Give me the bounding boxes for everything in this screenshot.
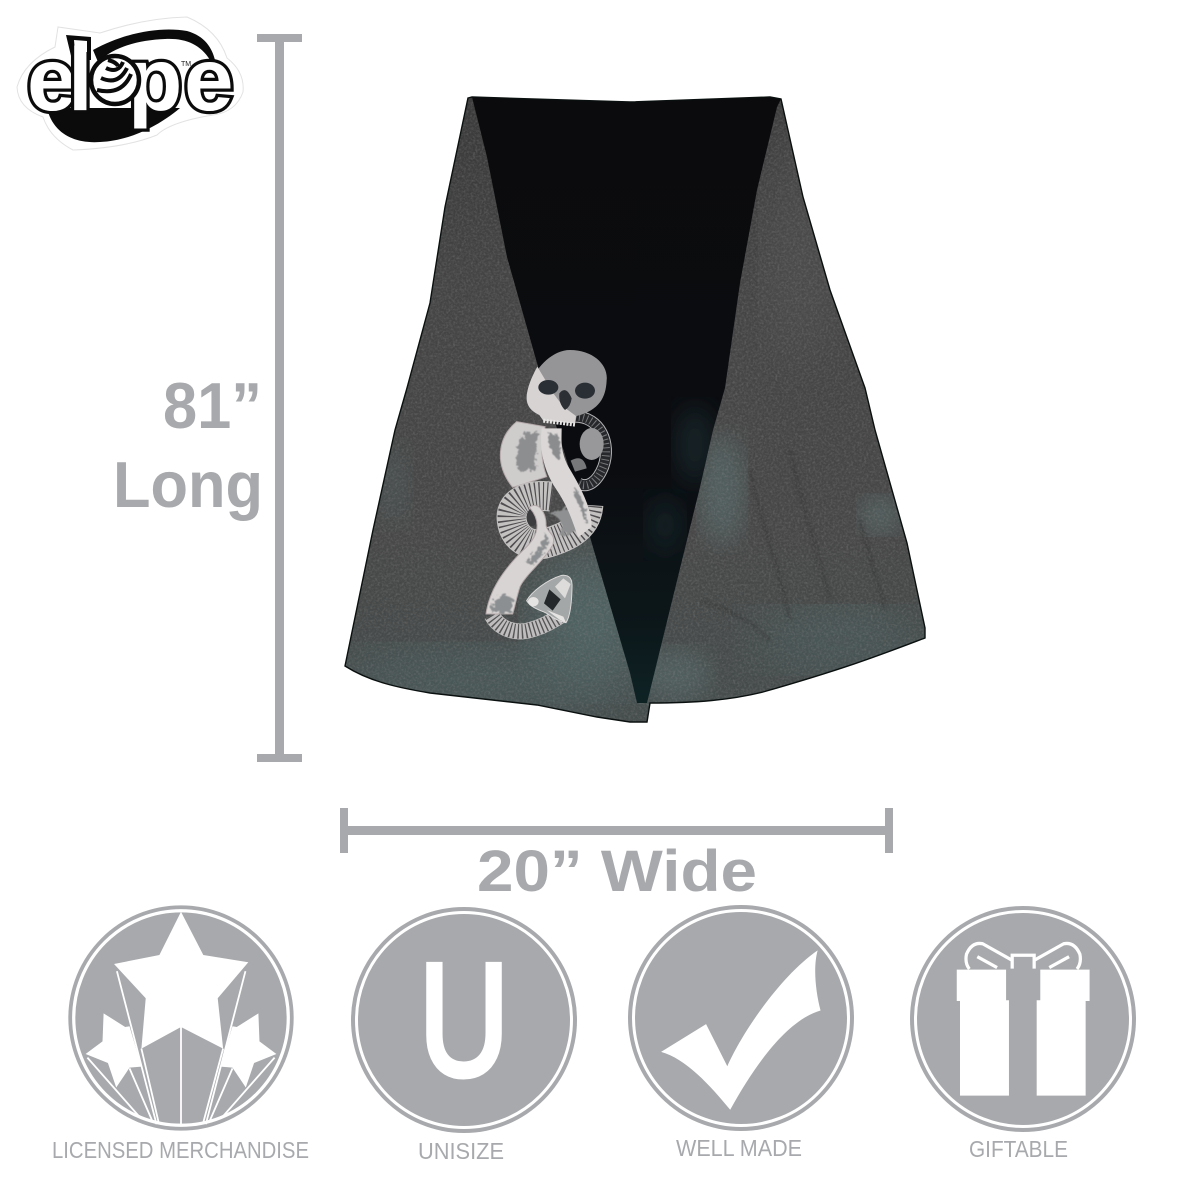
logo: elope	[17, 17, 243, 150]
scarf centre black panel	[472, 98, 780, 703]
dark mark: skull and snake	[486, 350, 607, 631]
badge: well made	[628, 905, 854, 1161]
skull	[527, 350, 607, 425]
length value: 81”	[163, 369, 262, 442]
snake ring behind skull	[571, 417, 606, 485]
logo spiral	[91, 56, 139, 104]
horizontal measurement bar	[340, 808, 893, 853]
logo wordmark: elpe	[27, 29, 234, 129]
logo black swoosh	[47, 29, 215, 142]
scarf photo	[330, 85, 940, 735]
icon: letter U	[351, 907, 577, 1133]
length word: Long	[113, 448, 263, 521]
logo letter l top	[74, 40, 87, 52]
scarf side panels	[330, 85, 940, 735]
badge: unisize	[351, 907, 577, 1164]
caption: LICENSED MERCHANDISE	[52, 1137, 309, 1163]
logo sticker outline	[17, 17, 243, 150]
badge: licensed merchandise	[52, 905, 309, 1163]
snake head	[527, 575, 572, 623]
upper snake coil	[500, 422, 547, 487]
central snake ribbon	[541, 428, 592, 537]
vertical measurement bar	[257, 34, 302, 762]
scarf edge	[345, 97, 925, 722]
length label	[113, 369, 263, 521]
badge: giftable	[910, 906, 1136, 1162]
lower ribbed coil	[492, 615, 562, 631]
caption: WELL MADE	[676, 1135, 802, 1161]
caption: GIFTABLE	[969, 1136, 1068, 1162]
ribbed coil	[512, 496, 588, 544]
icon: stars	[68, 905, 294, 1131]
logo trademark: TM	[181, 61, 191, 68]
caption: UNISIZE	[418, 1138, 504, 1164]
icon: check mark	[628, 905, 854, 1131]
coil centre hole	[527, 509, 537, 526]
lower snake body	[486, 505, 554, 614]
icon: letter U: U	[419, 931, 509, 1110]
icon: gift box	[910, 906, 1136, 1132]
width label: 20” Wide	[477, 839, 757, 904]
